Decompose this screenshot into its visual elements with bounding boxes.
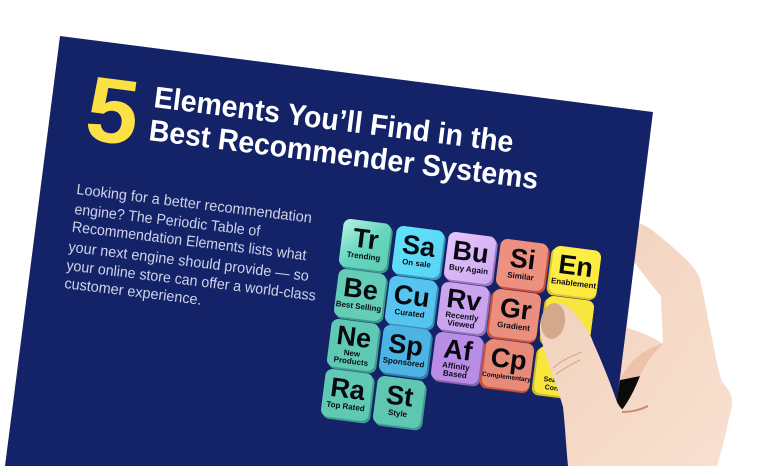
intro text block: engine? The Periodic Table of <box>74 201 262 240</box>
tile: Af: Af <box>442 333 475 367</box>
tile: Tr: Trending <box>346 250 381 263</box>
tile: Ra: Top Rated <box>326 399 365 413</box>
tile: Ne: New <box>343 348 361 359</box>
tile: Af <box>430 331 486 387</box>
hand: fingers behind the page <box>568 222 732 466</box>
tile: St <box>372 375 428 431</box>
tile: St: Style <box>387 408 408 419</box>
tile: Tr <box>338 218 394 274</box>
tile: Sa <box>391 225 447 281</box>
intro text block <box>64 181 317 309</box>
tile: Gr: Gr <box>498 292 534 326</box>
tile: partly hidden yellow: Content <box>544 384 572 395</box>
hand: thumb over the page <box>539 302 717 466</box>
intro text block: your online store can offer a world-class <box>66 257 317 305</box>
intro text block: Recommendation Elements lists what <box>71 219 308 264</box>
tile: Bu <box>443 231 499 287</box>
tile: Cp: Complementary <box>482 371 532 384</box>
tile: Ra <box>320 368 376 424</box>
tile: Af: Affinity <box>442 360 471 373</box>
periodic table of elements <box>320 218 602 431</box>
gap between fingers <box>627 262 663 344</box>
tile: Af: Based <box>442 368 467 380</box>
tile: Sp: Sp <box>387 328 425 362</box>
tile: Rv: Rv <box>445 283 483 317</box>
tile: partly hidden yellow: Seasonal <box>543 376 575 387</box>
tile: Sp <box>378 324 434 380</box>
finger shadow <box>616 376 640 411</box>
tile: Ne: Products <box>333 355 369 368</box>
intro text block: customer experience. <box>64 275 203 309</box>
tile: Tr: Tr <box>351 223 381 256</box>
tile: Cp <box>479 338 536 394</box>
tile: yellow hidden by thumb <box>539 295 595 351</box>
tile: En: Enablement <box>550 276 597 291</box>
tile: Ra: Ra <box>329 372 368 406</box>
tile: Sp: Sponsored <box>382 355 425 370</box>
tile: En <box>546 245 602 301</box>
tile: Rv: Viewed <box>447 318 475 331</box>
intro text block: Looking for a better recommendation <box>76 181 313 227</box>
tile: Cu <box>384 275 440 331</box>
page: navy brochure sheet <box>5 36 653 466</box>
tile: Cu: Cu <box>392 279 432 313</box>
title: Best Recommender Systems <box>147 114 540 196</box>
title <box>147 81 540 196</box>
tile: Si: Si <box>508 243 537 276</box>
tile: Ne: Ne <box>335 320 373 354</box>
knuckle creases <box>553 352 582 374</box>
tile: Si <box>495 238 551 294</box>
tile: Cu: Curated <box>394 307 425 320</box>
tile: Gr <box>486 288 542 344</box>
tile: En: En <box>557 249 595 283</box>
big yellow number 5: 5 <box>80 58 145 165</box>
tile: Sa: Sa <box>400 229 438 263</box>
tile: Sa: On sale <box>402 257 432 270</box>
tile: Be: Best Selling <box>335 299 382 314</box>
tile: St: St <box>384 379 415 413</box>
tile: Rv: Recently <box>445 310 480 323</box>
tile: Si: Similar <box>507 270 534 283</box>
intro text block: your next engine should provide — so <box>68 239 310 285</box>
tile: Rv <box>436 281 492 337</box>
thumbnail <box>539 302 567 340</box>
title: Elements You’ll Find in the <box>152 81 515 159</box>
tile: Be: Be <box>342 272 380 306</box>
tile: partly hidden yellow <box>531 345 587 401</box>
tile: Gr: Gradient <box>497 320 531 333</box>
tile: Be <box>333 268 389 324</box>
tile: Ne <box>326 318 382 374</box>
tile: Cp: Cp <box>489 342 529 376</box>
tile: Bu: Bu <box>451 235 491 269</box>
tile: Bu: Buy Again <box>448 262 489 276</box>
